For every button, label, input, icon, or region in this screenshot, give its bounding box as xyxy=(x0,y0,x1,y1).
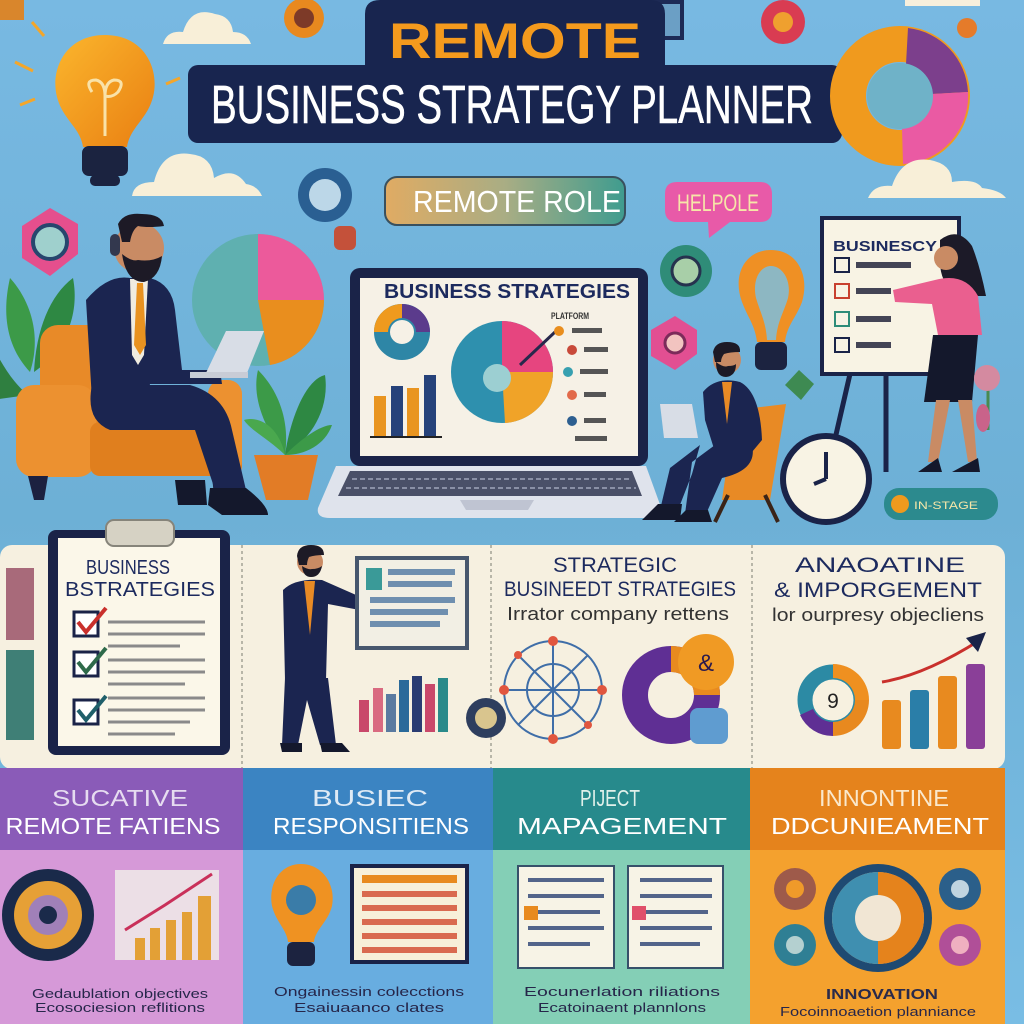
laptop xyxy=(318,268,662,518)
title tab: REMOTE xyxy=(365,0,665,72)
checklist xyxy=(74,608,205,734)
heading: laptop screen title: BUSINESS STRATEGIES xyxy=(384,281,630,303)
icon: donut chart top right xyxy=(848,28,968,164)
donut chart: analysis: 9 xyxy=(827,690,839,713)
cloud: top left xyxy=(163,12,251,44)
title banner xyxy=(188,65,842,143)
text: strategic business strategies: Irrator company rettens xyxy=(507,604,729,624)
heading: remote patterns: REMOTE FATIENS xyxy=(6,813,220,839)
caption: remote patterns: Gedaublation objectives xyxy=(32,987,208,1001)
heading: remote patterns: SUCATIVE xyxy=(52,785,188,811)
bar chart: presentation xyxy=(359,676,448,732)
caption: business responsibilities: Ongainessin colecctions xyxy=(274,985,464,999)
clipboard: business strategies xyxy=(48,520,230,755)
pie chart: behind man xyxy=(192,234,324,366)
small icons xyxy=(774,868,981,966)
pie chart: laptop screen xyxy=(451,321,555,423)
armchair xyxy=(16,325,242,500)
text: strategic business strategies: STRATEGIC xyxy=(553,554,677,577)
heading: project management: MAPAGEMENT xyxy=(517,813,727,839)
icon: light bulb xyxy=(15,22,180,186)
caption: innovation: Focoinnoaetion planniance xyxy=(780,1005,976,1019)
heading: innovation: DDCUNIEAMENT xyxy=(771,813,989,839)
text: analysis and improvement: & IMPORGEMENT xyxy=(774,579,982,602)
decorative top icons xyxy=(0,0,980,44)
timeline pill: IN-STAGE xyxy=(914,500,978,512)
document cards xyxy=(518,866,723,968)
cloud: right middle xyxy=(868,160,1006,198)
caption: remote patterns xyxy=(32,987,208,1015)
caption: project management: Eocunerlation riliations xyxy=(524,985,720,999)
heading: clipboard: BUSINESS xyxy=(86,557,170,579)
donut chart: purple with icons xyxy=(635,634,734,744)
heading: business responsibilities: BUSIEC xyxy=(312,785,428,811)
person: seated man with laptop on orange chair xyxy=(642,342,786,522)
clock xyxy=(783,436,869,522)
panel: project management teal xyxy=(493,768,750,1024)
label: help speech bubble xyxy=(665,182,772,238)
text: analysis and improvement xyxy=(772,554,984,625)
icon: orange outline light bulb xyxy=(739,250,804,370)
icon: small target badge xyxy=(466,698,506,738)
caption: project management xyxy=(524,985,720,1015)
heading: whiteboard: BUSINESCY xyxy=(833,238,937,255)
ring chart xyxy=(824,864,932,972)
whiteboard with checklist xyxy=(822,218,959,472)
text: strategic business strategies: BUSINEEDT STRATEGIES xyxy=(504,578,736,601)
plant: potted xyxy=(244,370,332,500)
person: man on armchair with laptop xyxy=(86,214,268,515)
bar chart: laptop screen xyxy=(370,375,442,437)
person: presenter in suit xyxy=(280,545,372,752)
title tab: REMOTE: REMOTE xyxy=(389,13,641,69)
panel: business responsibilities blue xyxy=(243,768,493,1024)
caption: business responsibilities xyxy=(274,985,464,1015)
heading: project management: PIJECT xyxy=(580,785,640,811)
donut chart: analysis xyxy=(800,664,869,736)
panel: cream strategy strip xyxy=(0,545,1005,769)
text: analysis and improvement: ANAOATINE xyxy=(795,554,965,577)
heading: business responsibilities: RESPONSITIENS xyxy=(273,813,469,839)
list: laptop screen legend xyxy=(551,311,608,441)
caption: business responsibilities: Esaiuaanco clates xyxy=(294,1001,444,1015)
text: analysis and improvement: lor ourpresy objecliens xyxy=(772,605,984,625)
caption: remote patterns: Ecosociesion reflitions xyxy=(35,1001,205,1015)
list: laptop screen legend: PLATFORM xyxy=(551,311,589,321)
donut chart: laptop screen xyxy=(374,304,430,352)
label: help speech bubble: HELPOLE xyxy=(677,190,759,217)
icon: small badge centre xyxy=(298,168,356,250)
panel: remote patterns purple xyxy=(0,768,243,1024)
network diagram xyxy=(499,636,607,744)
chart screen: presentation xyxy=(357,558,467,648)
timeline pill xyxy=(884,488,998,520)
cloud: left middle xyxy=(132,154,262,196)
icon: pink gear badge xyxy=(651,316,697,370)
dial icon xyxy=(2,869,94,961)
caption: innovation xyxy=(780,986,976,1019)
heading: remote patterns xyxy=(6,785,220,839)
heading: clipboard xyxy=(65,557,215,601)
table card xyxy=(352,866,467,962)
icon: bulb xyxy=(271,864,333,966)
icon: pink badge left xyxy=(22,208,78,276)
label: remote role xyxy=(385,177,625,225)
caption: project management: Ecatoinaent plannlons xyxy=(538,1001,706,1015)
person: woman presenting xyxy=(893,234,986,472)
heading: innovation: INNONTINE xyxy=(819,785,949,811)
panel: innovation orange xyxy=(750,768,1005,1024)
growth chart xyxy=(115,870,219,960)
heading: business responsibilities xyxy=(273,785,469,839)
small green leaf icon xyxy=(785,370,814,400)
icon: green badge xyxy=(660,245,712,297)
plant: right flower xyxy=(974,365,1000,432)
text: strategic business strategies xyxy=(504,554,736,624)
caption: innovation: INNOVATION xyxy=(826,986,938,1003)
heading: clipboard: BSTRATEGIES xyxy=(65,579,215,601)
heading: project management xyxy=(517,785,727,839)
heading: innovation xyxy=(771,785,989,839)
donut chart: purple with icons: & xyxy=(698,650,714,677)
bar chart: analysis with arrow xyxy=(882,632,986,749)
small side images xyxy=(6,568,34,740)
plant: left xyxy=(0,278,75,400)
label: remote role: REMOTE ROLE xyxy=(413,184,621,219)
